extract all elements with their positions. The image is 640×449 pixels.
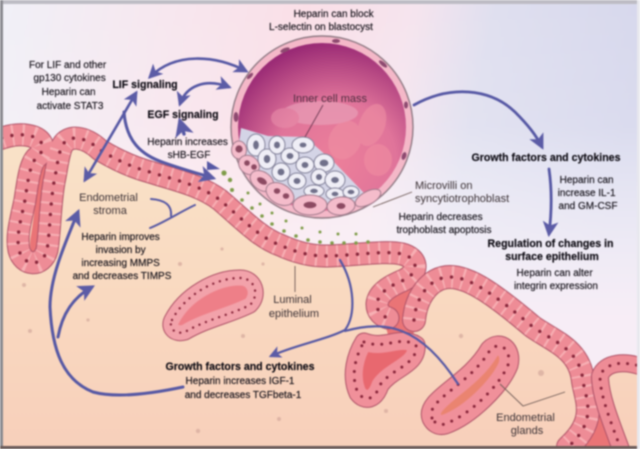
label: luminal epithelium: epithelium <box>269 308 319 320</box>
text: STAT3 note: activate STAT3 <box>37 101 104 112</box>
text: L-selectin note: L-selectin on blastocyst <box>269 22 373 33</box>
arrow: blastocyst to growth factors <box>414 92 542 147</box>
text: lower growth factors: and decreases TGFbeta-1 <box>185 390 302 401</box>
arrow: LIF signaling to epithelium <box>124 112 213 178</box>
uterine glands deep red patches <box>30 146 622 449</box>
text: lower growth factors: Heparin increases IGF-1 <box>186 376 295 387</box>
luminal epithelium <box>0 135 640 449</box>
text: integrin note: integrin expression <box>514 281 598 292</box>
label: endometrial glands: Endometrial <box>496 412 555 424</box>
text: lower growth factors <box>166 361 315 401</box>
text: invasion note: invasion by <box>96 245 146 256</box>
text: invasion note: Heparin improves <box>81 232 160 243</box>
text: heparin increases sHB-EGF: Heparin increases <box>147 137 228 148</box>
text: IL-1 note: and GM-CSF <box>559 201 617 212</box>
heading: right growth factors: Growth factors and cytokines <box>472 152 621 164</box>
leader lines <box>295 192 565 406</box>
arrowhead: heparin to sHB-EGF <box>207 161 220 170</box>
heading: EGF signaling: EGF signaling <box>147 109 219 121</box>
arrow: EGF signaling to blastocyst <box>180 83 229 104</box>
text: L-selectin note: Heparin can block <box>294 9 375 20</box>
cavity texture <box>271 100 392 176</box>
text: lower growth factors: Growth factors and cytokines <box>166 361 315 373</box>
arrow: gland to lower growth factors <box>345 326 458 384</box>
arrow: LIF signaling to blastocyst <box>150 59 246 77</box>
ICM nuclei <box>253 140 354 196</box>
text: apoptosis note: Heparin decreases <box>399 212 483 223</box>
text: IL-1 note: increase IL-1 <box>558 188 616 199</box>
arrows <box>50 59 551 395</box>
arrow: growth factors to regulation <box>549 169 551 234</box>
text: apoptosis note: trophoblast apoptosis <box>396 225 492 236</box>
arrow: LIF signaling to stroma <box>85 93 136 180</box>
polar trophoblast cells <box>232 141 383 216</box>
label: endometrial stroma: stroma <box>93 205 128 217</box>
arrow: big loop from growth factors to stroma <box>50 212 183 395</box>
polar trophoblast nuclei <box>235 145 345 209</box>
text: IL-1 note: Heparin can <box>560 175 614 186</box>
heading: LIF signaling: LIF signaling <box>112 79 178 91</box>
ICM cell outlines <box>247 134 359 200</box>
arrow: stroma to invasion <box>150 199 195 228</box>
panel: uterine stroma tissue <box>0 135 640 449</box>
microvilli and secreted factors <box>221 170 370 245</box>
label: endometrial stroma: Endometrial <box>79 192 138 204</box>
label: microvilli: Microvilli on <box>415 180 472 192</box>
endometrial gland: centre <box>171 278 255 333</box>
label: inner cell mass: Inner cell mass <box>293 93 367 105</box>
text: integrin note: Heparin can alter <box>517 268 593 279</box>
inner cell mass cells <box>238 128 364 207</box>
text: STAT3 note: Heparin can <box>42 87 96 98</box>
text: invasion note: and decreases TIMPS <box>73 271 172 282</box>
label: luminal epithelium: Luminal <box>273 294 312 306</box>
arrow: epithelium to lower growth factors <box>271 260 352 356</box>
stroma cells <box>22 247 544 433</box>
heading: regulation of surface epithelium: surface epithelium <box>505 251 599 263</box>
endometrial gland: lower right <box>431 346 509 425</box>
trophoblast nuclei <box>234 39 408 196</box>
heading: regulation of surface epithelium: Regulation of changes in <box>488 238 614 250</box>
text: STAT3 note: For LIF and other <box>29 60 107 71</box>
label: microvilli: syncytiotrophoblast <box>415 193 509 205</box>
text: STAT3 note: gp130 cytokines <box>33 73 106 84</box>
label: endometrial glands: glands <box>511 425 544 437</box>
blastocyst <box>231 36 413 218</box>
blastocoel cavity <box>238 43 406 211</box>
arrow: up to invasion text <box>58 287 92 337</box>
text: heparin increases sHB-EGF: sHB-EGF <box>168 150 210 161</box>
arrow: heparin to EGF signaling <box>180 121 184 134</box>
inner cell mass leader <box>305 105 323 137</box>
trophoblast wall <box>231 36 413 218</box>
endometrial gland: lower middle <box>354 341 416 398</box>
text: invasion note: increasing MMPS <box>81 258 160 269</box>
